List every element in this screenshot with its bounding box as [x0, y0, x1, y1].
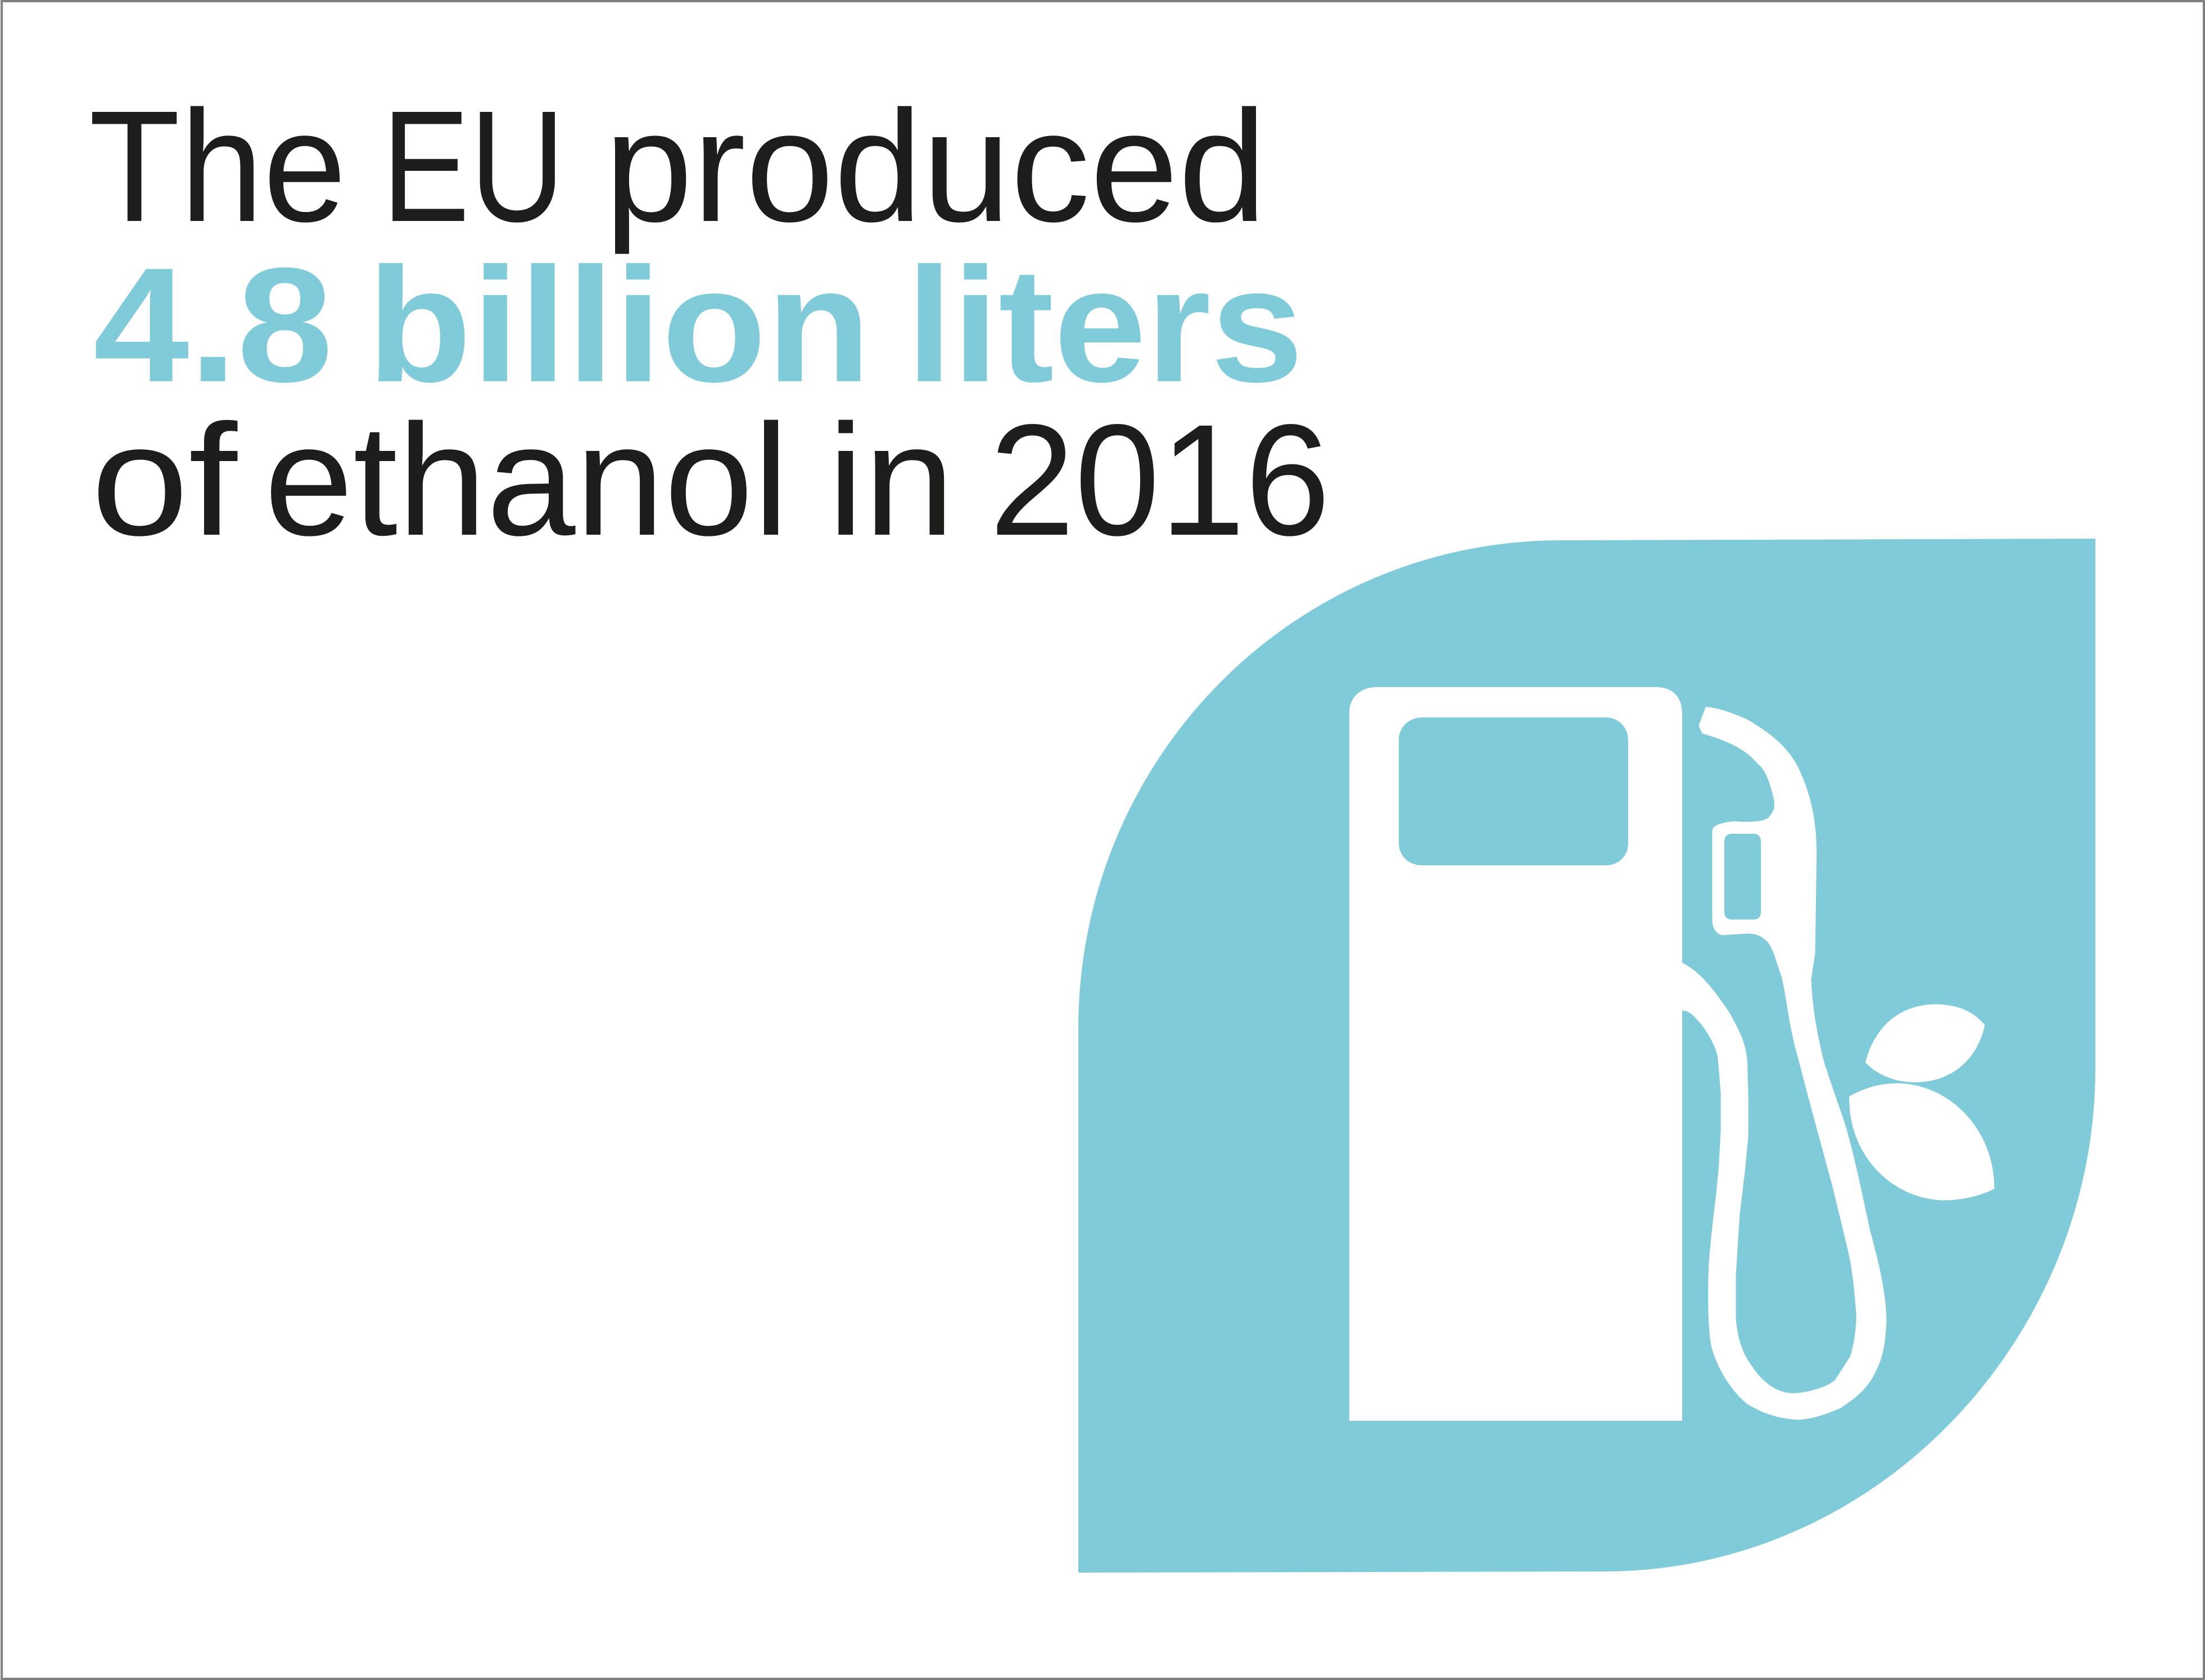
title line 3: ethanol: [264, 391, 789, 568]
icon: nozzle and hose: [1682, 707, 1994, 1420]
title line 1: [89, 78, 1267, 256]
title line 2: highlighted figure: [93, 234, 1303, 416]
title line 2: highlighted figure: liters: [906, 234, 1303, 416]
title line 3: of: [91, 391, 238, 568]
title line 3: 2016: [989, 391, 1330, 568]
panel: blue leaf shape: [1078, 539, 2095, 1573]
title: [89, 78, 1330, 568]
title line 3: [91, 391, 1330, 568]
title line 1: The: [89, 78, 346, 255]
title line 2: highlighted figure: 4.8: [93, 234, 333, 416]
icon: lower leaf: [1849, 1083, 1994, 1200]
title line 2: highlighted figure: billion: [367, 234, 871, 416]
title line 1: produced: [604, 78, 1267, 256]
title line 1: EU: [382, 78, 565, 255]
icon: upper leaf: [1865, 1004, 1985, 1082]
title line 3: in: [828, 391, 955, 568]
icon: fuel pump body: [1349, 687, 1682, 1421]
